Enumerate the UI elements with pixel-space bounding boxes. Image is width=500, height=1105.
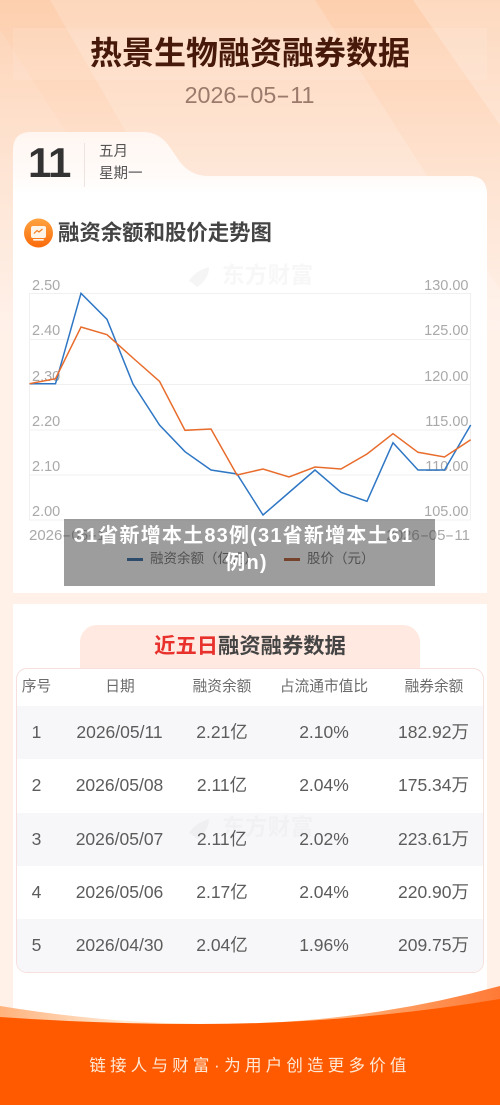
- month and weekday: 星期一: [99, 166, 142, 182]
- x axis end label: -: [445, 527, 454, 544]
- day number: 11: [28, 139, 70, 186]
- share price line: [30, 327, 471, 477]
- row 2: 2.11亿: [197, 775, 247, 795]
- legend: share price: 股价（元）: [307, 551, 374, 566]
- legend: financing balance: 融资余额（亿元）: [150, 551, 258, 566]
- financing balance line: [30, 293, 471, 515]
- row 1: 1: [32, 722, 41, 742]
- row 2: 2: [32, 775, 41, 795]
- date subtitle: -: [236, 82, 250, 108]
- panel: trend chart: [13, 132, 487, 593]
- left axis labels: 2.20: [32, 414, 60, 430]
- row 4: [32, 882, 469, 902]
- row 1: [17, 706, 483, 759]
- row 3: 2.02%: [299, 828, 349, 848]
- right axis labels: 120.00: [424, 369, 468, 385]
- row 2: 2.04%: [299, 775, 349, 795]
- row 1: 2.21亿: [196, 722, 248, 742]
- right axis labels: 110.00: [425, 459, 468, 475]
- row 4: 220.90万: [398, 882, 469, 902]
- chart heading: 融资余额和股价走势图: [58, 221, 272, 245]
- table header row: 融券余额: [405, 679, 463, 695]
- left axis labels: 2.10: [32, 459, 60, 475]
- left axis labels: 2.50: [32, 278, 60, 294]
- row 2: 2026/05/08: [76, 775, 163, 795]
- row 3: 2.11亿: [197, 828, 247, 848]
- left axis labels: 2.00: [32, 504, 60, 520]
- row 2: 175.34万: [398, 775, 469, 795]
- row 3: 2026/05/07: [76, 828, 163, 848]
- table watermark: [187, 814, 314, 842]
- data table: [16, 668, 484, 973]
- row 3: [17, 812, 483, 866]
- row 5: 2026/04/30: [76, 935, 163, 955]
- footer slogan: 链接人与财富·为用户创造更多价值: [89, 1057, 411, 1075]
- x axis end label: -: [420, 527, 429, 544]
- table header row: 序号: [22, 679, 51, 695]
- date subtitle: -: [276, 82, 290, 108]
- row 5: [17, 919, 483, 972]
- left axis labels: 2.40: [32, 323, 60, 339]
- row 4: 2026/05/06: [76, 882, 163, 902]
- left axis labels: [32, 278, 60, 520]
- background header gradient: [0, 0, 500, 276]
- right axis labels: 115.00: [425, 414, 468, 430]
- row 3: 223.61万: [398, 828, 469, 848]
- table header row: 融资余额: [193, 679, 251, 695]
- table watermark: 东方财富: [222, 815, 314, 840]
- x axis start label: 2026 05 11: [29, 527, 113, 544]
- footer band: [0, 986, 500, 1105]
- chart legend: [127, 551, 374, 566]
- headline overlay: [64, 519, 435, 586]
- row 2: [32, 775, 469, 795]
- panel background with date tab: [13, 132, 487, 593]
- right axis labels: 105.00: [424, 504, 468, 520]
- table header row: 占流通市值比: [280, 679, 368, 695]
- right axis labels: 125.00: [424, 323, 468, 339]
- x axis start label: -: [88, 527, 97, 544]
- month and weekday: 五月: [99, 144, 128, 160]
- row 1: 2026/05/11: [76, 722, 163, 742]
- line chart: [29, 278, 472, 520]
- title: 热景生物融资融券数据: [90, 35, 410, 71]
- icon: chart monitor: [24, 218, 53, 248]
- table header row: [22, 678, 463, 695]
- date subtitle: 2026 05 11: [185, 82, 314, 108]
- row 5: 1.96%: [299, 935, 349, 955]
- row 4: 2.04%: [299, 882, 349, 902]
- row 4: 4: [32, 882, 41, 902]
- row 1: 182.92万: [398, 722, 469, 742]
- right axis labels: 130.00: [424, 278, 468, 294]
- month and weekday: [99, 144, 142, 182]
- row 3: 3: [32, 828, 41, 848]
- panel: five day table: [13, 604, 487, 1044]
- left axis labels: 2.30: [32, 369, 60, 385]
- row 4: 2.17亿: [196, 882, 248, 902]
- x axis end label: 2026 05 11: [386, 527, 470, 544]
- x axis start label: -: [62, 527, 71, 544]
- table heading tab: [80, 625, 420, 669]
- row 1: 2.10%: [299, 722, 349, 742]
- watermark: 东方财富: [222, 263, 314, 288]
- row 5: 209.75万: [398, 935, 469, 955]
- row 5: 2.04亿: [196, 935, 248, 955]
- right axis labels: [424, 278, 468, 520]
- headline overlay: 31省新增本土83例(31省新增本土61 例n): [74, 524, 413, 574]
- row 5: 5: [32, 935, 41, 955]
- table header row: 日期: [105, 679, 135, 695]
- table heading tab: 近五日融资融券数据: [154, 634, 346, 658]
